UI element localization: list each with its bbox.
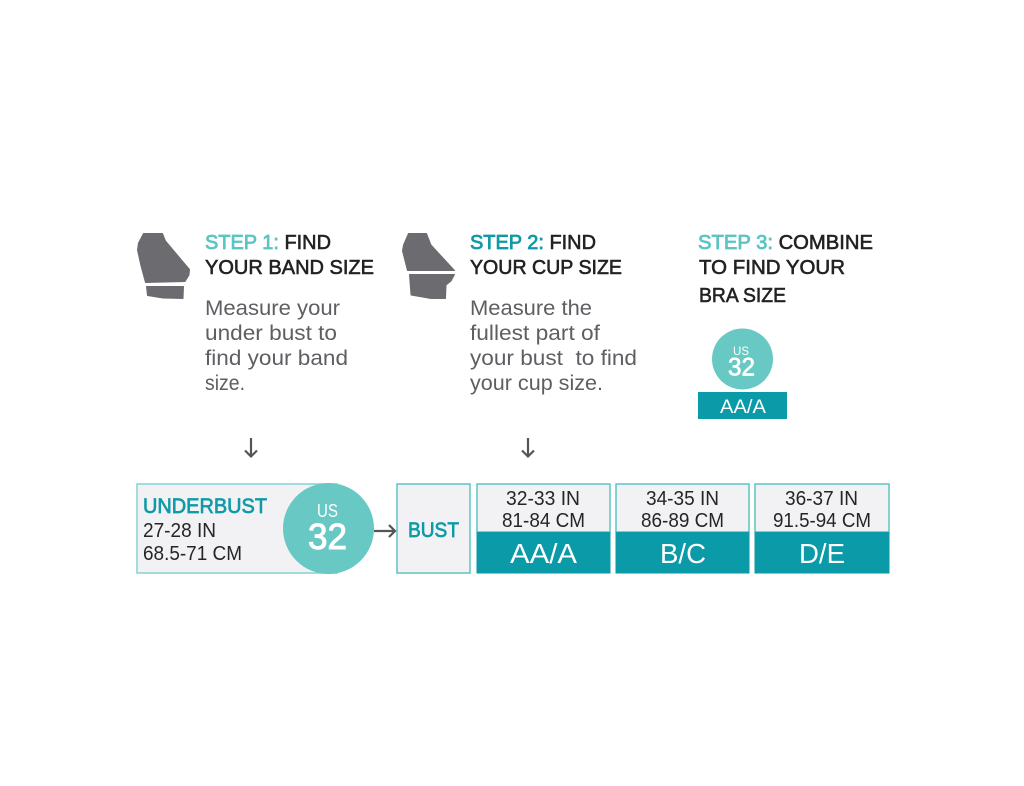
- card: D/E: [754, 484, 890, 574]
- card: B/C: 86-89 CM: [641, 510, 724, 532]
- heading: step 3: TO FIND YOUR: [699, 256, 845, 279]
- heading: step 1: [205, 231, 374, 279]
- panel: step 3: [698, 231, 873, 419]
- card: B/C: [616, 484, 750, 574]
- text: step 2 instructions: your bust to find: [470, 347, 637, 370]
- heading: step 1: YOUR BAND SIZE: [205, 256, 374, 279]
- text: underbust measurements: 68.5-71 CM: [143, 543, 242, 565]
- card: AA/A: 32-33 IN: [506, 488, 580, 510]
- heading: step 2: STEP 2: FIND: [470, 231, 596, 254]
- arrow: step 2 down: [522, 438, 534, 456]
- text: underbust label: UNDERBUST: [143, 495, 267, 518]
- card: D/E: 36-37 IN: [785, 488, 858, 510]
- card: AA/A: AA/A: [510, 538, 577, 569]
- text: step 1 instructions: [205, 297, 348, 395]
- card: D/E: 91.5-94 CM: [773, 510, 871, 532]
- card: AA/A: 81-84 CM: [502, 510, 585, 532]
- panel: bust: [397, 484, 470, 573]
- label: AA/A: AA/A: [720, 397, 766, 418]
- panel: step 1: [138, 231, 374, 395]
- panel: step 2: [402, 231, 637, 395]
- icon: torso with bust line: [402, 234, 454, 298]
- heading: step 3: STEP 3: COMBINE: [698, 231, 873, 254]
- heading: step 2: YOUR CUP SIZE: [470, 256, 622, 279]
- badge: US 32: 32: [728, 354, 755, 382]
- panel: bust: BUST: [408, 519, 459, 542]
- card: B/C: B/C: [660, 538, 706, 569]
- card: AA/A: [476, 484, 610, 574]
- heading: step 3: BRA SIZE: [699, 284, 786, 307]
- badge: US 32 large: 32: [308, 516, 347, 557]
- text: underbust measurements: [143, 520, 242, 565]
- arrow: underbust to bust: [374, 525, 395, 537]
- arrow: step 1 down: [245, 438, 257, 456]
- heading: step 2: [470, 231, 622, 279]
- card: D/E: D/E: [799, 538, 845, 569]
- text: step 1 instructions: Measure your: [205, 297, 340, 320]
- label: AA/A: [698, 392, 787, 419]
- heading: step 1: STEP 1: FIND: [205, 231, 331, 254]
- text: step 1 instructions: find your band: [205, 347, 348, 370]
- panel: underbust: [137, 483, 374, 574]
- card: B/C: 34-35 IN: [646, 488, 719, 510]
- text: step 2 instructions: Measure the: [470, 297, 592, 320]
- badge: US 32: US: [733, 344, 749, 358]
- text: step 2 instructions: your cup size.: [470, 372, 603, 395]
- text: underbust measurements: 27-28 IN: [143, 520, 216, 542]
- text: step 1 instructions: under bust to: [205, 322, 337, 345]
- text: step 2 instructions: fullest part of: [470, 322, 600, 345]
- heading: step 3: [698, 231, 873, 307]
- badge: US 32 large: US: [317, 501, 338, 521]
- badge: US 32 large: [283, 483, 374, 574]
- icon: torso with under-bust band: [138, 234, 190, 298]
- text: step 1 instructions: size.: [205, 372, 245, 395]
- badge: US 32: [712, 328, 773, 390]
- text: step 2 instructions: [470, 297, 637, 395]
